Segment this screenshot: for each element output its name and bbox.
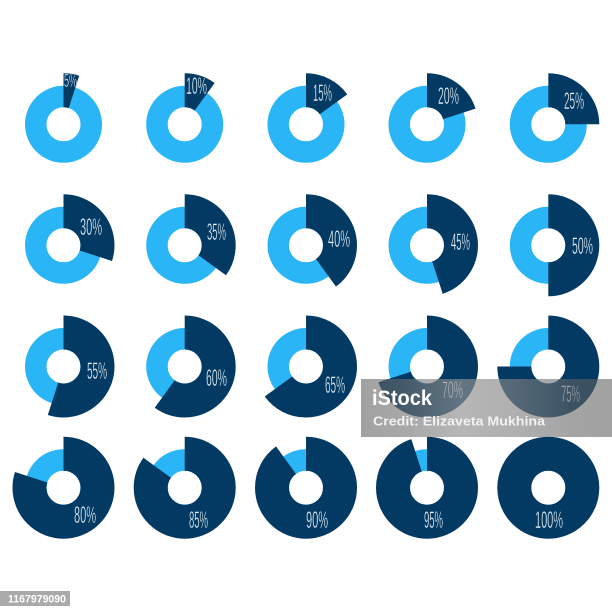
chart: 5%: 5% [64, 71, 77, 91]
chart: 95%: 95% [424, 507, 443, 534]
chart: 35% [151, 211, 226, 279]
chart: 40% [272, 211, 350, 279]
chart: 85%: 85% [189, 507, 208, 534]
text: 30% [80, 214, 102, 241]
chart: 20% [393, 83, 461, 158]
chart: 90%: 90% [306, 507, 328, 534]
chart: 85% [151, 454, 219, 534]
chart: 55% [30, 332, 107, 400]
text: 80% [74, 502, 96, 529]
chart: 10%: 10% [186, 73, 207, 100]
chart: 75% [514, 332, 582, 408]
text: 65% [325, 372, 345, 399]
text: 75% [561, 381, 580, 408]
chart: 15% [272, 80, 340, 158]
chart: 25% [514, 88, 584, 158]
chart: 95% [393, 454, 461, 534]
chart: 5% [30, 71, 98, 158]
text: 40% [328, 226, 350, 253]
chart: 90% [272, 454, 340, 534]
text: 35% [207, 219, 226, 246]
chart: 100% [514, 454, 582, 534]
chart: 45% [393, 211, 470, 279]
chart: 15%: 15% [313, 80, 332, 107]
text: 55% [87, 358, 107, 385]
text: 70% [442, 377, 463, 404]
text: 60% [206, 365, 227, 392]
image id tag: 1167979090 [8, 594, 66, 606]
watermark banner [361, 379, 612, 437]
chart: 80% [30, 454, 98, 529]
chart: 60% [151, 332, 227, 400]
text: 20% [438, 83, 459, 110]
chart: 65% [272, 332, 345, 400]
chart: 50% [514, 211, 593, 279]
text: 25% [564, 88, 584, 115]
chart: 10% [151, 73, 219, 158]
watermark logo: iStock [372, 387, 432, 410]
text: 45% [451, 229, 470, 256]
watermark credit: Credit: Elizaveta Mukhina [373, 414, 546, 428]
chart: 30% [30, 211, 102, 279]
chart: 70% [393, 332, 463, 404]
chart: 100%: 100% [535, 507, 563, 534]
image id tag [0, 591, 70, 606]
